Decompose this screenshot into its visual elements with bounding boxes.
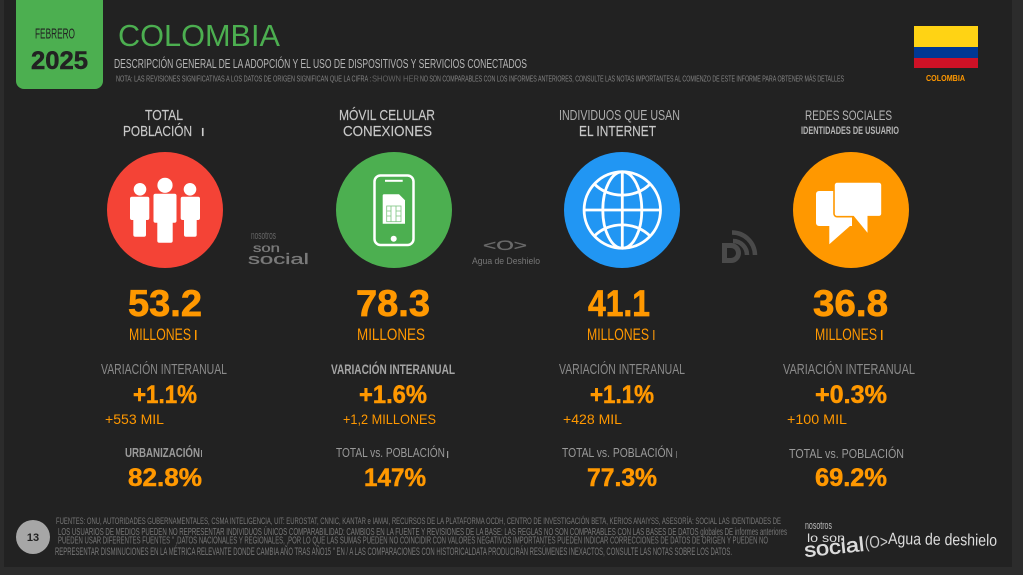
change label: VARIACIÓN INTERANUAL [101,361,227,378]
value: 36.8 [813,283,888,324]
icon: people [107,152,223,268]
watermark: nosotros son social: nosotros [251,230,276,242]
heading: TOTAL [145,108,183,124]
unit: MILLONES [815,326,877,344]
note: SHOWN HER [372,74,419,84]
panel: social media [783,108,915,492]
logo: nosotros lo son social Agua de deshielo: (O> [864,532,888,552]
watermark: Agua de Deshielo: <O> [483,237,527,253]
watermark: nosotros son social: social [248,251,309,268]
change absolute: +1,2 MILLONES [343,411,436,427]
heading [559,108,680,140]
ratio label: TOTAL vs. POBLACIÓN [789,446,904,461]
flag: Colombia: COLOMBIA [926,74,965,83]
watermark: nosotros son social [248,230,309,268]
change label: VARIACIÓN INTERANUAL [331,362,455,377]
heading [801,108,899,137]
heading: POBLACIÓN [123,123,192,140]
heading: IDENTIDADES DE USUARIO [801,125,899,137]
value: 53.2 [128,283,202,324]
change percent: +1.1% [590,381,654,409]
sources text [55,516,787,558]
change label: VARIACIÓN INTERANUAL [559,361,685,378]
change percent: +1.1% [133,381,197,409]
change absolute: +428 MIL [563,411,622,427]
logo: nosotros lo son social Agua de deshielo: nosotros [805,520,832,532]
logo: nosotros lo son social Agua de deshielo: social [803,534,865,562]
panel: internet users [559,108,685,492]
unit: MILLONES [129,326,191,344]
subtitle: DESCRIPCIÓN GENERAL DE LA ADOPCIÓN Y EL USO DE DISPOSITIVOS Y SERVICIOS CONECTADOS [114,56,527,71]
heading [123,108,204,140]
panel: total population [101,108,227,492]
heading: INDIVIDUOS QUE USAN [559,108,680,124]
heading: CONEXIONES [343,124,432,140]
value: 78.3 [356,283,430,324]
ratio value: 69.2% [815,464,887,492]
logo: nosotros lo son social Agua de deshielo [803,520,997,562]
heading: MÓVIL CELULAR [339,107,435,124]
change label: VARIACIÓN INTERANUAL [783,361,915,378]
watermark: Agua de Deshielo: Agua de Deshielo [472,256,540,267]
date badge: 2025 [31,47,88,75]
ratio label: TOTAL vs. POBLACIÓN [336,445,445,460]
ratio label: TOTAL vs. POBLACIÓN [562,445,673,460]
unit: MILLONES [587,326,649,344]
logo: nosotros lo son social Agua de deshielo: lo son [807,531,845,545]
icon: globe [564,152,680,268]
date badge [16,0,103,89]
date badge: FEBRERO [35,26,75,42]
note [116,74,844,84]
value: 41.1 [588,283,650,324]
heading: REDES SOCIALES [805,108,892,123]
icon: speech bubbles [793,152,909,268]
page number [16,520,50,554]
heading: EL INTERNET [579,124,656,140]
unit: MILLONES [357,326,425,344]
watermark: nosotros son social: son [253,241,280,255]
change absolute: +553 MIL [105,411,164,427]
panel: mobile connections [331,107,455,492]
ratio value: 77.3% [587,464,657,492]
change absolute: +100 MIL [787,411,847,427]
logo: nosotros lo son social Agua de deshielo: Agua de deshielo [888,530,997,550]
page number: 13 [27,532,39,544]
icon: phone with SIM [336,152,452,268]
urbanization value: 82.8% [128,464,202,492]
change percent: +1.6% [359,381,427,409]
ratio value: 147% [364,464,426,492]
urbanization label: URBANIZACIÓN [125,445,200,460]
change percent: +0.3% [815,381,887,409]
note: NOTA: LAS REVISIONES SIGNIFICATIVAS A LOS DATOS DE ORIGEN SIGNIFICAN QUE LA CIFRA : [116,74,371,84]
heading [339,107,435,140]
flag: Colombia [914,26,978,83]
title: COLOMBIA [118,18,280,53]
watermark: D signal icon [724,232,755,260]
watermark: Agua de Deshielo [472,237,540,267]
